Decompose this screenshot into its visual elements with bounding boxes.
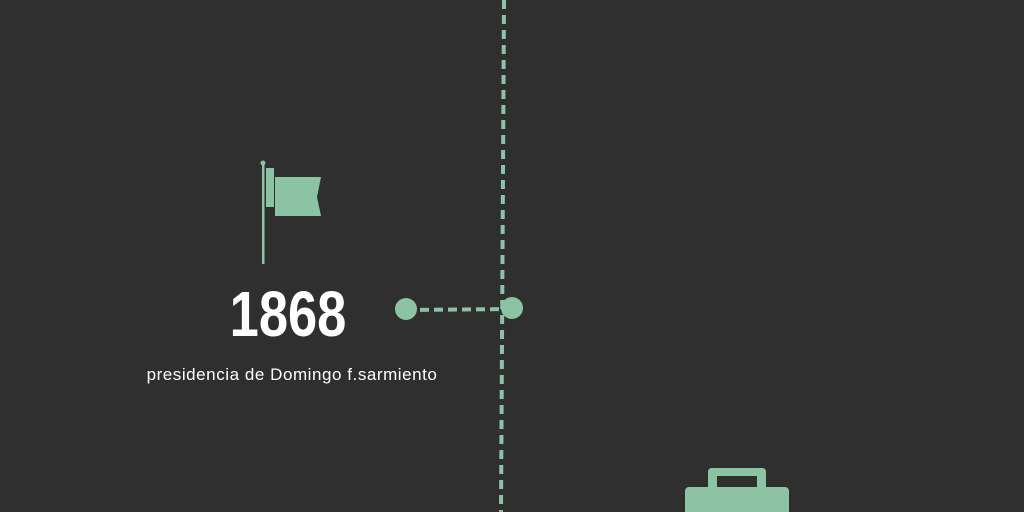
icon: flag [260,160,321,264]
description text: presidencia de Domingo f.sarmiento [147,365,437,384]
connector dot left [395,298,417,320]
timeline vertical dashed line [501,0,504,512]
connector dashed line [406,309,512,310]
connector dot on timeline [501,297,523,319]
icon: briefcase [685,468,789,512]
year heading: 1868 [230,278,346,350]
